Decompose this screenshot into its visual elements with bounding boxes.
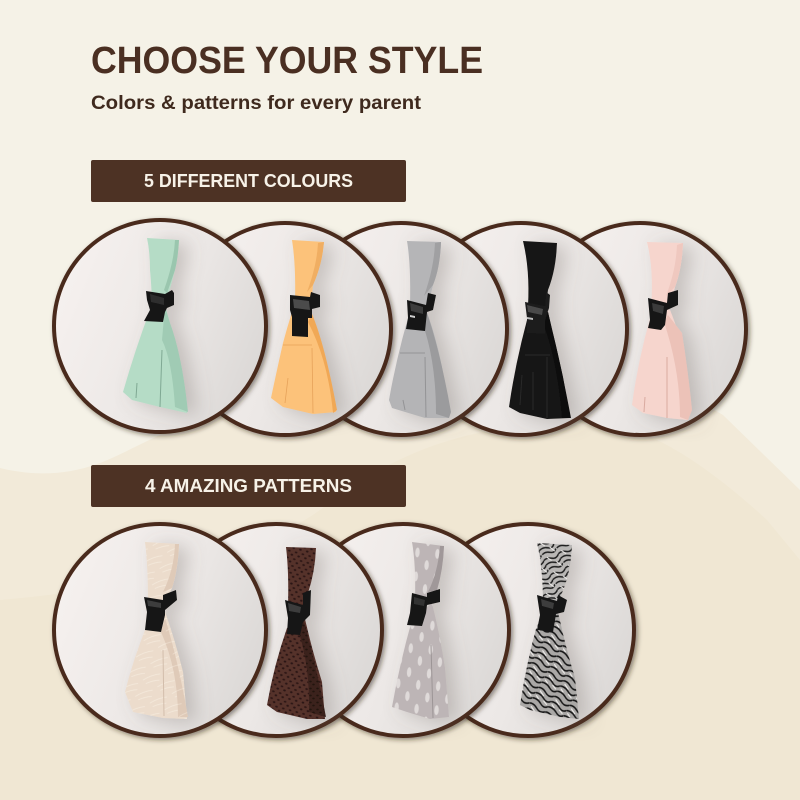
panel: five colour swatches	[54, 220, 746, 435]
swatch: cream leaf sling	[54, 524, 266, 736]
swatch: zebra sling	[422, 524, 634, 736]
swatch: orange sling	[179, 223, 391, 435]
banner: patterns heading	[91, 465, 406, 507]
panel: four pattern swatches	[54, 524, 634, 736]
swatch: mint sling	[54, 220, 266, 432]
swatch: grey sling	[295, 223, 507, 435]
swatch: black sling	[415, 223, 627, 435]
banner: colours heading	[91, 160, 406, 202]
banner: patterns heading: 4 AMAZING PATTERNS	[145, 475, 352, 496]
swatch: ikat sling	[297, 524, 509, 736]
swatch: leopard sling	[170, 524, 382, 736]
swatch: pink sling	[534, 223, 746, 435]
subtitle: Colors & patterns for every parent	[91, 92, 422, 114]
banner: colours heading: 5 DIFFERENT COLOURS	[144, 170, 353, 191]
title: CHOOSE YOUR STYLE	[91, 40, 483, 82]
